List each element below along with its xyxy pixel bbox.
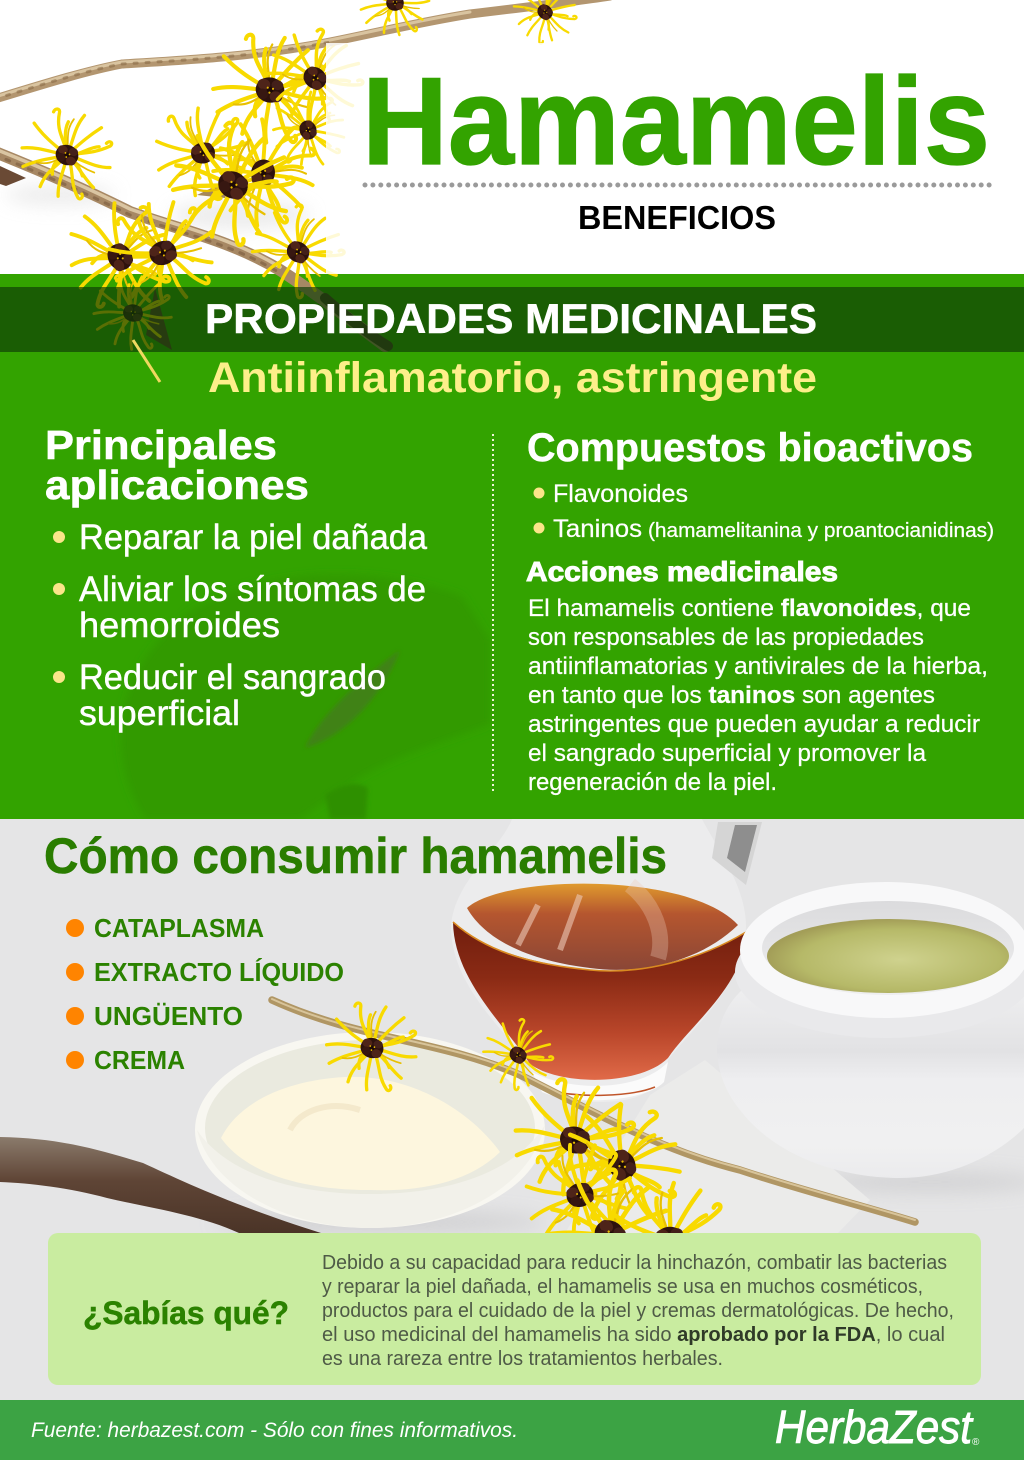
panel: bioactive compounds — [526, 426, 994, 796]
source note: Fuente: herbazest.com - Sólo con fines informativos. — [31, 1419, 518, 1442]
list: applications — [53, 518, 428, 733]
callout text: productos para el cuidado de la piel y cremas dermatológicas. De hecho, — [322, 1300, 954, 1322]
heading: main applications — [45, 422, 309, 508]
callout text: es una rareza entre los tratamientos herbales. — [322, 1348, 723, 1370]
heading: bioactive compounds: Compuestos bioactivos — [527, 426, 973, 470]
photo: top witch hazel branches — [0, 0, 610, 350]
list: applications: Aliviar los síntomas de — [79, 570, 426, 609]
icon: flower cluster top — [11, 0, 588, 355]
text block: medicinal actions: antiinflamatorias y antivirales de la hierba, — [528, 653, 988, 680]
photo: white jar with green ointment — [717, 882, 1024, 1178]
heading band: medicinal properties — [0, 287, 1024, 382]
panel: green medicinal properties section — [0, 274, 1024, 819]
callout: did you know — [48, 1233, 981, 1385]
text block: medicinal actions: son responsables de las propiedades — [528, 624, 924, 651]
heading: how to consume: Cómo consumir hamamelis — [44, 828, 667, 884]
footer — [0, 1400, 1024, 1460]
logo: HerbaZest: ® — [972, 1437, 980, 1448]
list: applications: Reducir el sangrado — [79, 658, 386, 697]
panel: main applications — [45, 422, 428, 733]
panel: how to consume background — [0, 819, 1024, 1400]
list: compounds: (hamamelitanina y proantocianidinas) — [648, 520, 994, 542]
callout text: el uso medicinal del hamamelis ha sido aprobado por la FDA, lo cual — [322, 1324, 945, 1346]
heading: main applications: Principales — [45, 422, 277, 468]
icon: flowers on lower branch — [318, 995, 729, 1318]
subtitle: BENEFICIOS — [578, 199, 776, 236]
photo: shadows on table — [215, 1172, 1024, 1234]
photo: soft shadows on white — [5, 185, 310, 229]
list: applications: Reparar la piel dañada — [79, 518, 428, 557]
text block: medicinal actions: astringentes que pueden ayudar a reducir — [528, 711, 980, 738]
text block: medicinal actions: El hamamelis contiene flavonoides, que — [528, 595, 971, 622]
callout text: Debido a su capacidad para reducir la hinchazón, combatir las bacterias — [322, 1252, 947, 1274]
photo: gauze cloth — [565, 1060, 870, 1233]
logo: HerbaZest: HerbaZest — [775, 1401, 974, 1453]
heading band: medicinal properties: PROPIEDADES MEDICINALES — [205, 295, 817, 342]
list: applications: superficial — [79, 694, 240, 733]
list: consumption forms — [66, 913, 344, 1075]
title: Hamamelis — [362, 53, 990, 191]
list: compounds: Taninos — [553, 515, 642, 543]
callout text — [322, 1252, 954, 1370]
list: compounds: Flavonoides — [553, 480, 688, 508]
text block: medicinal actions — [528, 595, 988, 796]
photo: dish with cream — [195, 1032, 545, 1228]
callout text: y reparar la piel dañada, el hamamelis se usa en muchos cosméticos, — [322, 1276, 923, 1298]
text block: medicinal actions: regeneración de la piel. — [528, 769, 777, 796]
list: compounds — [534, 480, 994, 543]
list: consumption forms: EXTRACTO LÍQUIDO — [94, 957, 344, 987]
photo: wooden spoon — [0, 1137, 321, 1233]
heading: medicinal actions: Acciones medicinales — [526, 556, 838, 587]
list: consumption forms: CATAPLASMA — [94, 913, 264, 943]
photo: glass bottle with extract — [451, 819, 762, 1102]
list: consumption forms: CREMA — [94, 1045, 185, 1075]
list: consumption forms: UNGÜENTO — [94, 1001, 243, 1031]
decorative leaf in green section — [121, 575, 490, 819]
photo: lower witch hazel branch — [272, 999, 915, 1222]
heading: main applications: aplicaciones — [45, 462, 309, 508]
callout heading: ¿Sabías qué? — [83, 1295, 289, 1331]
translucent title panel — [326, 43, 1024, 274]
subheading: properties: Antiinflamatorio, astringente — [208, 354, 817, 402]
list: applications: hemorroides — [79, 606, 280, 645]
text block: medicinal actions: en tanto que los taninos son agentes — [528, 682, 935, 709]
text block: medicinal actions: el sangrado superficial y promover la — [528, 740, 927, 767]
